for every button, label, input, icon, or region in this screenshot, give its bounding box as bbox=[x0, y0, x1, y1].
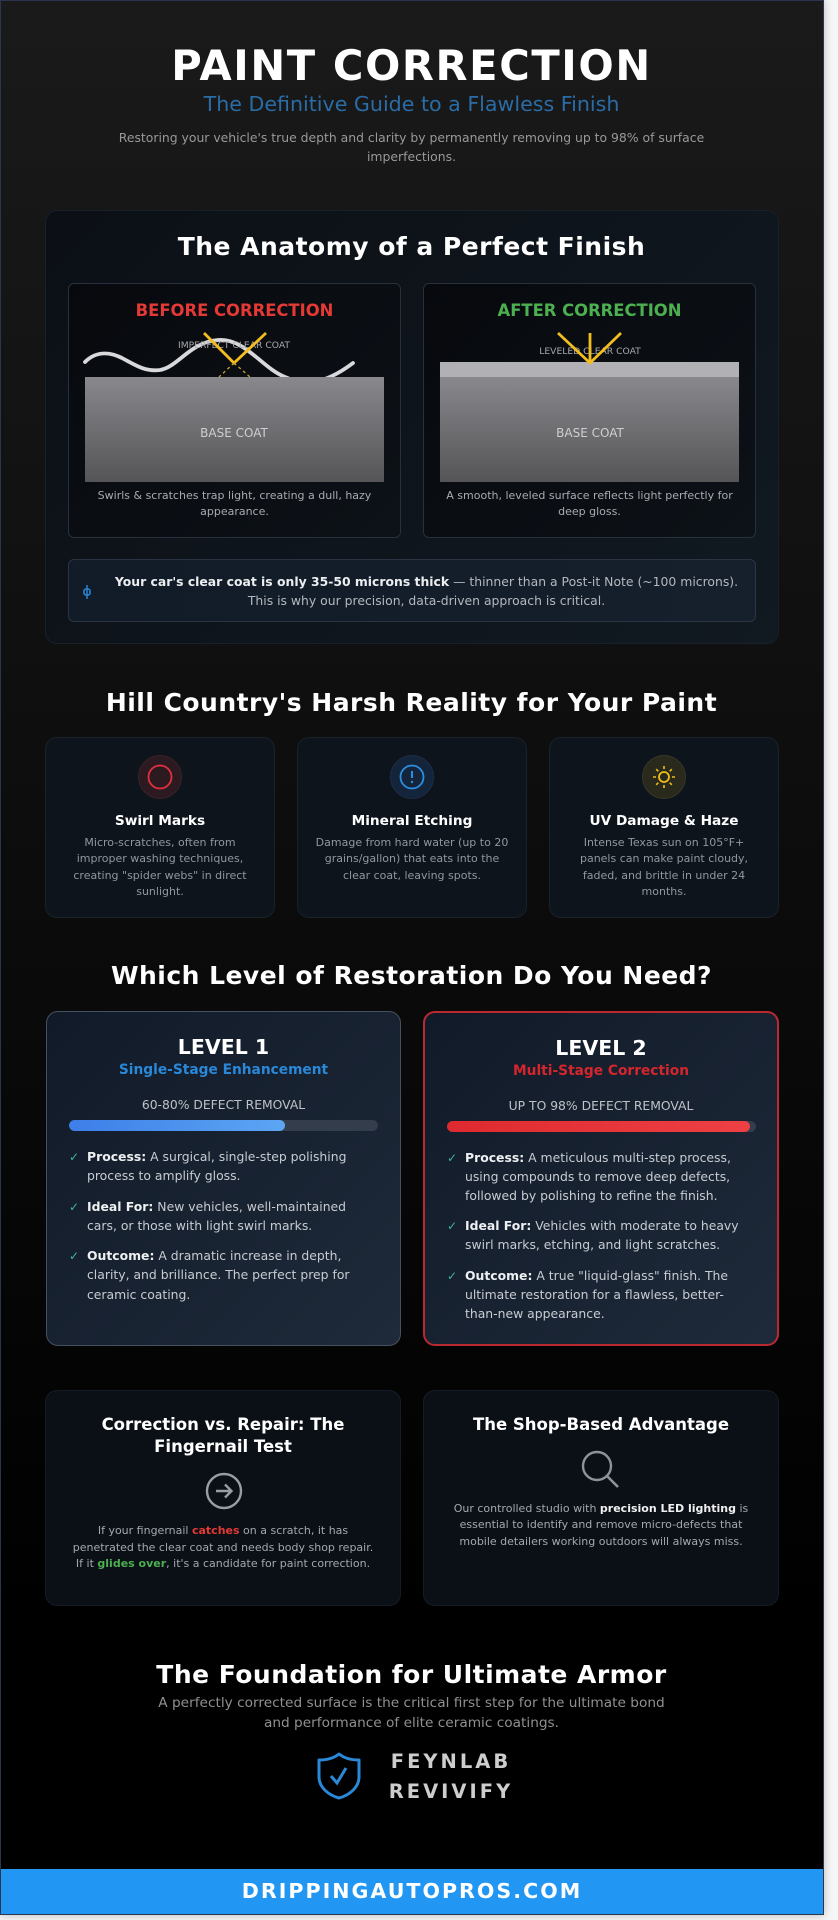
panel: after correction bbox=[423, 283, 756, 538]
uv text: faded, and brittle in under 24 bbox=[583, 869, 745, 882]
level 2 outcome: than-new appearance. bbox=[465, 1306, 605, 1321]
fingernail title: Fingernail Test bbox=[154, 1437, 292, 1456]
level 2 ideal for bbox=[447, 1218, 739, 1252]
icon: magnifier bbox=[582, 1450, 619, 1488]
level 2 ideal for: Ideal For: Vehicles with moderate to heavy bbox=[465, 1218, 739, 1233]
level 2 progress bar bbox=[446, 1120, 756, 1132]
panel: level 2 bbox=[423, 1011, 779, 1346]
swirl text: sunlight. bbox=[136, 885, 184, 898]
shop text bbox=[454, 1502, 748, 1548]
shop text: Our controlled studio with precision LED lighting is bbox=[454, 1502, 748, 1515]
fingernail text: If your fingernail catches on a scratch, it has bbox=[98, 1524, 348, 1537]
icon: sun bbox=[642, 755, 686, 799]
level 1 progress fill bbox=[69, 1120, 285, 1131]
level 2 process: using compounds to remove deep defects, bbox=[465, 1169, 730, 1184]
icon: shield check bbox=[318, 1752, 360, 1800]
etching text: clear coat, leaving spots. bbox=[343, 869, 481, 882]
level 2 progress fill bbox=[446, 1120, 750, 1132]
uv text: months. bbox=[642, 885, 686, 898]
panel: mineral etching bbox=[297, 737, 527, 918]
level 2 ideal for: ✓ bbox=[447, 1219, 457, 1233]
level 1 progress bar bbox=[69, 1120, 378, 1131]
fingernail text bbox=[73, 1524, 373, 1570]
diagram: after correction: LEVELED CLEAR COAT bbox=[539, 346, 641, 357]
fingernail text: If it glides over, it's a candidate for paint correction. bbox=[76, 1557, 370, 1570]
level 2 ideal for: swirl marks, etching, and light scratches. bbox=[465, 1237, 720, 1252]
level 1 ideal for bbox=[69, 1198, 346, 1233]
panel: swirl marks bbox=[45, 737, 275, 918]
etching text bbox=[316, 836, 508, 882]
subtitle: The Definitive Guide to a Flawless Finish bbox=[204, 92, 619, 116]
uv text: panels can make paint cloudy, bbox=[580, 852, 748, 865]
icon: swirl ring bbox=[138, 755, 182, 799]
level 2 subtitle: Multi-Stage Correction bbox=[513, 1062, 689, 1078]
brand names: REVIVIFY bbox=[389, 1780, 513, 1803]
icon: etching alert bbox=[390, 755, 434, 799]
fingernail title: Correction vs. Repair: The bbox=[102, 1415, 344, 1434]
icon: arrow in circle bbox=[206, 1472, 242, 1510]
etching text: grains/gallon) that eats into the bbox=[325, 852, 499, 865]
shop text: mobile detailers working outdoors will always miss. bbox=[459, 1535, 743, 1548]
level 1 process: ✓ bbox=[69, 1150, 79, 1164]
swirl text bbox=[73, 836, 247, 898]
etching text: Damage from hard water (up to 20 bbox=[316, 836, 508, 849]
level 2 title: LEVEL 2 bbox=[555, 1036, 647, 1060]
callout: clear coat thickness bbox=[68, 559, 756, 622]
level 1 outcome: ceramic coating. bbox=[87, 1287, 190, 1302]
swirl text: Micro-scratches, often from bbox=[84, 836, 236, 849]
panel: anatomy of a perfect finish bbox=[45, 210, 779, 644]
footer bar bbox=[1, 1869, 823, 1914]
level 2 removal label: UP TO 98% DEFECT REMOVAL bbox=[509, 1098, 693, 1112]
level 2 outcome: Outcome: A true "liquid-glass" finish. The bbox=[465, 1268, 728, 1282]
level 1 ideal for: ✓ bbox=[69, 1200, 79, 1214]
before heading: BEFORE CORRECTION bbox=[136, 301, 333, 320]
diagram: before correction bbox=[83, 332, 384, 482]
title: PAINT CORRECTION bbox=[171, 41, 652, 90]
icon: micron gauge bbox=[83, 585, 91, 599]
foundation text bbox=[158, 1695, 665, 1731]
heading: foundation: The Foundation for Ultimate Armor bbox=[156, 1660, 667, 1689]
after caption bbox=[446, 489, 733, 518]
after caption: deep gloss. bbox=[558, 505, 621, 518]
heading: restoration levels: Which Level of Restoration Do You Need? bbox=[111, 961, 712, 990]
etching title: Mineral Etching bbox=[352, 813, 472, 829]
heading: anatomy: The Anatomy of a Perfect Finish bbox=[178, 232, 645, 261]
level 2 process: ✓ bbox=[447, 1150, 457, 1164]
level 2 process bbox=[447, 1150, 731, 1203]
swirl text: improper washing techniques, bbox=[77, 852, 243, 865]
level 2 outcome bbox=[447, 1268, 728, 1321]
before caption: Swirls & scratches trap light, creating a dull, hazy bbox=[98, 489, 371, 502]
level 1 process bbox=[69, 1149, 346, 1183]
after caption: A smooth, leveled surface reflects light perfectly for bbox=[446, 489, 733, 502]
panel: uv damage bbox=[549, 737, 779, 918]
level 2 process: followed by polishing to refine the finish. bbox=[465, 1188, 718, 1203]
panel: fingernail test bbox=[45, 1390, 401, 1606]
heading: harsh reality: Hill Country's Harsh Reality for Your Paint bbox=[106, 688, 717, 717]
level 1 process: Process: A surgical, single-step polishing bbox=[87, 1149, 346, 1164]
intro text: imperfections. bbox=[367, 149, 456, 164]
level 1 title: LEVEL 1 bbox=[178, 1035, 269, 1059]
brand names bbox=[389, 1750, 513, 1803]
level 1 outcome: clarity, and brilliance. The perfect prep for bbox=[87, 1267, 350, 1282]
uv title: UV Damage & Haze bbox=[589, 813, 739, 829]
footer url: DRIPPINGAUTOPROS.COM bbox=[242, 1879, 582, 1903]
after heading: AFTER CORRECTION bbox=[498, 301, 681, 320]
before caption: appearance. bbox=[200, 505, 269, 518]
fingernail text: penetrated the clear coat and needs body shop repair. bbox=[73, 1540, 373, 1554]
level 1 outcome: ✓ bbox=[69, 1249, 79, 1263]
level 1 outcome bbox=[69, 1248, 350, 1302]
panel: shop-based advantage bbox=[423, 1390, 779, 1606]
level 2 process: Process: A meticulous multi-step process, bbox=[465, 1150, 731, 1164]
diagram: after correction bbox=[440, 332, 739, 482]
callout text bbox=[114, 574, 738, 608]
uv text: Intense Texas sun on 105°F+ bbox=[584, 836, 744, 849]
panel: before correction bbox=[68, 283, 401, 538]
fingernail title bbox=[102, 1415, 344, 1456]
callout text: This is why our precision, data-driven approach is critical. bbox=[248, 593, 605, 608]
level 1 subtitle: Single-Stage Enhancement bbox=[119, 1062, 328, 1078]
intro text: Restoring your vehicle's true depth and clarity by permanently removing up to 98% of surface bbox=[119, 130, 704, 145]
level 1 outcome: Outcome: A dramatic increase in depth, bbox=[87, 1248, 341, 1263]
brand names: FEYNLAB bbox=[391, 1750, 511, 1773]
level 2 outcome: ultimate restoration for a flawless, better- bbox=[465, 1287, 724, 1302]
level 1 process: process to amplify gloss. bbox=[87, 1168, 240, 1183]
foundation text: A perfectly corrected surface is the critical first step for the ultimate bond bbox=[158, 1695, 665, 1711]
intro text bbox=[119, 130, 704, 164]
shop text: essential to identify and remove micro-defects that bbox=[460, 1518, 742, 1531]
diagram: before correction: IMPERFECT CLEAR COAT bbox=[178, 340, 290, 351]
level 2 outcome: ✓ bbox=[447, 1268, 457, 1282]
panel: level 1 bbox=[46, 1011, 401, 1346]
level 1 ideal for: Ideal For: New vehicles, well-maintained bbox=[87, 1198, 346, 1214]
foundation text: and performance of elite ceramic coatings. bbox=[264, 1715, 559, 1731]
level 1 ideal for: cars, or those with light swirl marks. bbox=[87, 1218, 312, 1233]
shop title: The Shop-Based Advantage bbox=[473, 1415, 729, 1434]
level 1 removal label: 60-80% DEFECT REMOVAL bbox=[142, 1098, 305, 1112]
before caption bbox=[98, 489, 371, 518]
swirl title: Swirl Marks bbox=[115, 813, 205, 829]
callout text: Your car's clear coat is only 35-50 microns thick — thinner than a Post-it Note (~100 microns). bbox=[115, 574, 738, 589]
diagram: before correction: BASE COAT bbox=[200, 426, 269, 440]
uv text bbox=[580, 836, 748, 898]
diagram: after correction: BASE COAT bbox=[556, 426, 625, 440]
swirl text: creating "spider webs" in direct bbox=[73, 869, 247, 882]
